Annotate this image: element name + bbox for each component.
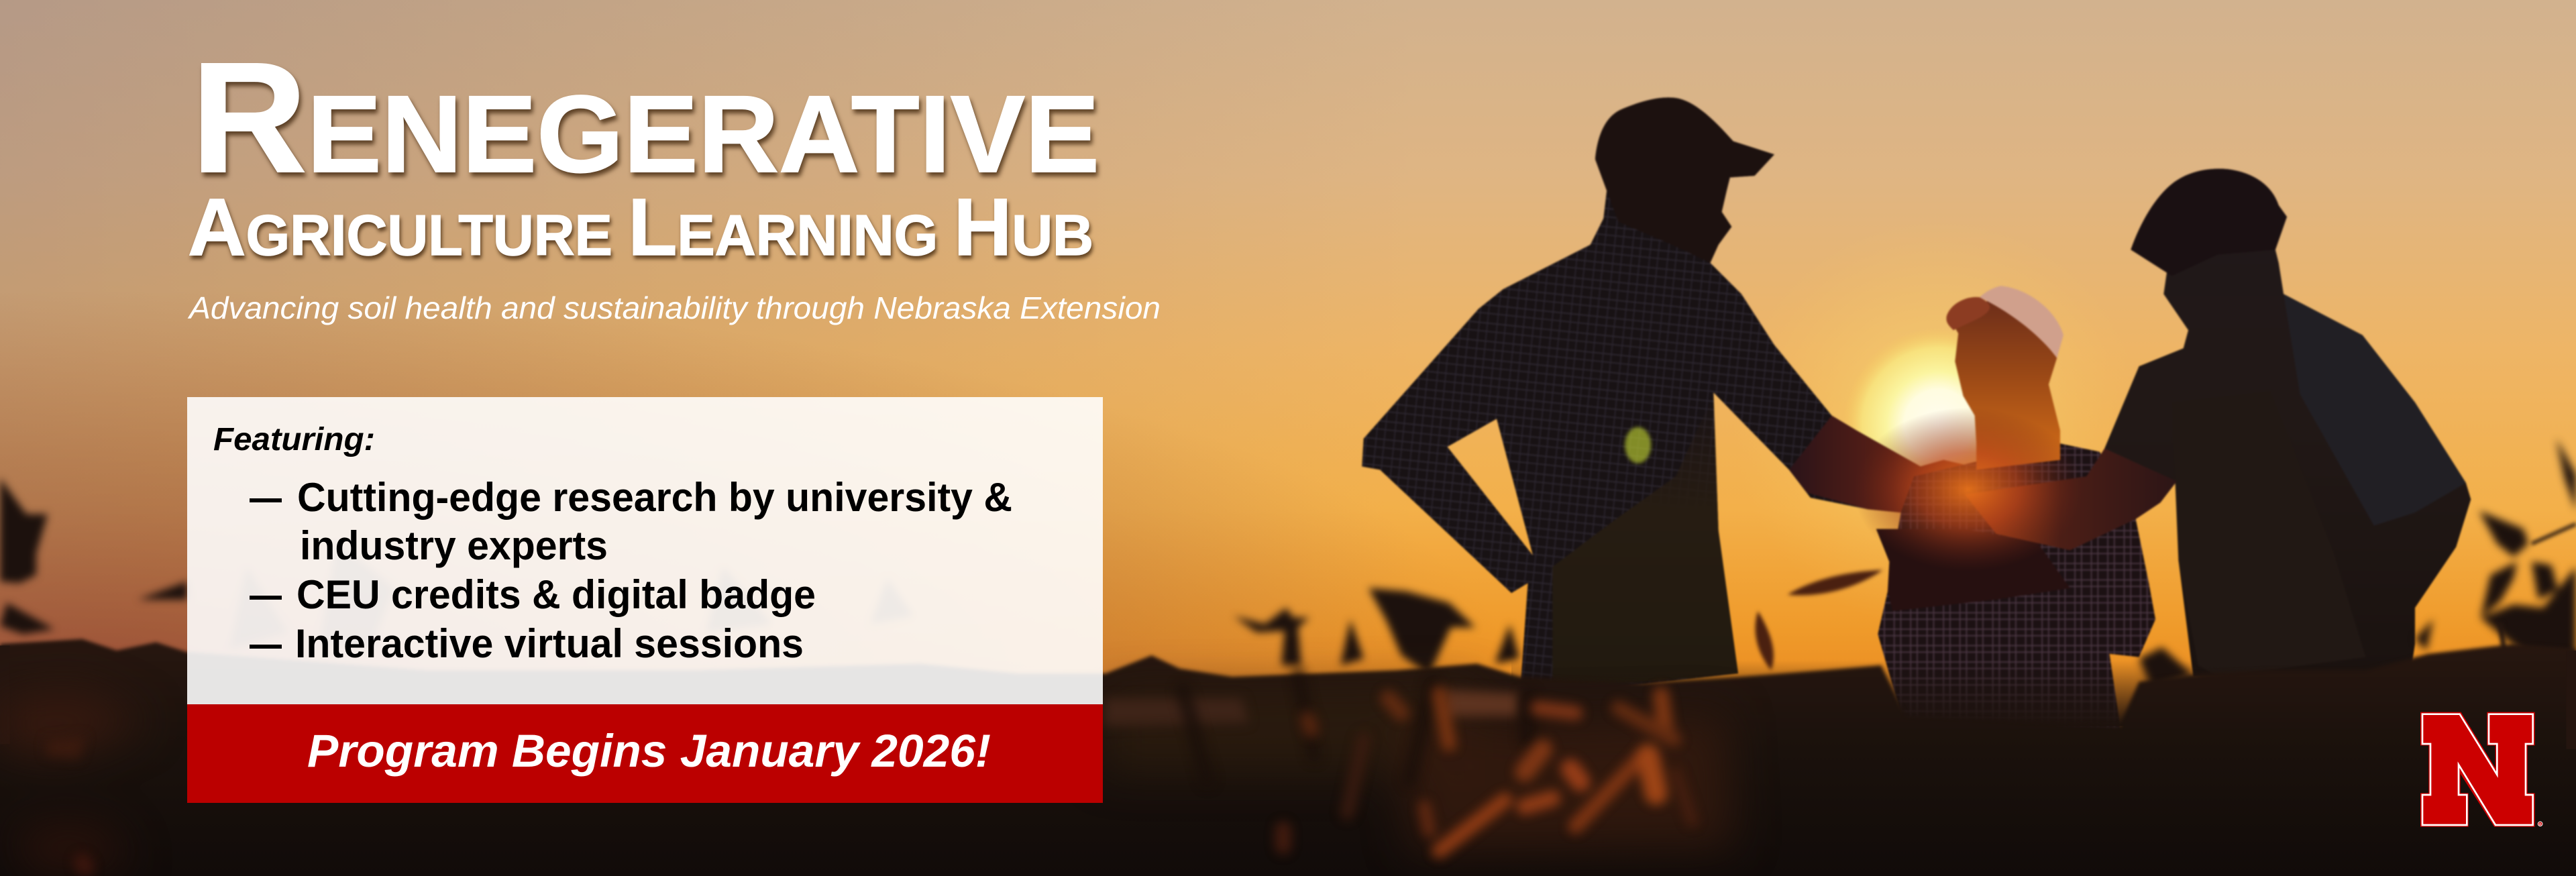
title line 1: RENEGERATIVE [191, 30, 1099, 205]
feature item 2: — [250, 572, 282, 617]
center farmer: cap [1980, 286, 2063, 358]
field dark stems [1183, 673, 1528, 780]
right farmer: cap [2131, 169, 2287, 276]
banner text: Program Begins January 2026! [307, 725, 991, 777]
left farmer: outstretched arm [1790, 416, 1962, 512]
feature item 3: Interactive virtual sessions [295, 621, 804, 666]
title [188, 30, 1099, 272]
feature item 1: — [250, 475, 282, 520]
farmers [1362, 97, 2471, 731]
field hazy patches [46, 690, 1519, 759]
sun core [1851, 337, 1977, 467]
feature item 3: — [250, 621, 282, 666]
banner background [187, 704, 1103, 803]
field brown underlay [0, 683, 1733, 871]
feature item 1 continued: industry experts [300, 523, 608, 568]
logo registered mark [2538, 822, 2542, 826]
center farmer: cap visor [1946, 297, 1990, 330]
right farmer: arm [1965, 449, 2177, 550]
left farmer: apron [1552, 443, 1737, 682]
feature list [250, 475, 1012, 666]
field base [0, 731, 2576, 876]
logo N white outline [2422, 714, 2533, 825]
logo N outer [2420, 712, 2534, 826]
tagline: Advancing soil health and sustainability through Nebraska Extension [187, 290, 1161, 325]
left farmer: body [1360, 190, 1867, 686]
field edge fill [0, 645, 2576, 749]
center farmer: tablet [1876, 529, 2070, 611]
panel background [187, 397, 1103, 704]
left farmer: cap and head [1595, 97, 1774, 263]
field orange highlights [82, 693, 1692, 867]
foreground leaves [0, 439, 2576, 690]
banner: program start [187, 704, 1103, 803]
center farmer: face and hair [1951, 296, 2060, 470]
leaf stems [2500, 524, 2576, 673]
right farmer: apron [2174, 480, 2184, 559]
panel: featuring [187, 397, 1103, 704]
center farmer: body [1878, 443, 2155, 731]
feature item 2: CEU credits & digital badge [297, 572, 816, 617]
sun flare [1625, 427, 1651, 463]
background field leaves [1756, 570, 1883, 670]
right farmer: body [2104, 248, 2472, 677]
figures fade into field [1511, 660, 2448, 726]
sun wide glow [1819, 304, 2062, 555]
title line 2: AGRICULTURE LEARNING HUB [188, 181, 1093, 272]
featuring label: Featuring: [213, 422, 375, 457]
logo: Nebraska N [2420, 712, 2542, 826]
shaking hands glow [1853, 407, 2083, 571]
feature item 1: Cutting-edge research by university & [297, 475, 1012, 520]
logo registered mark: R [2539, 822, 2542, 826]
right farmer: sleeve [2284, 294, 2466, 526]
foreground crop field [0, 639, 2576, 875]
